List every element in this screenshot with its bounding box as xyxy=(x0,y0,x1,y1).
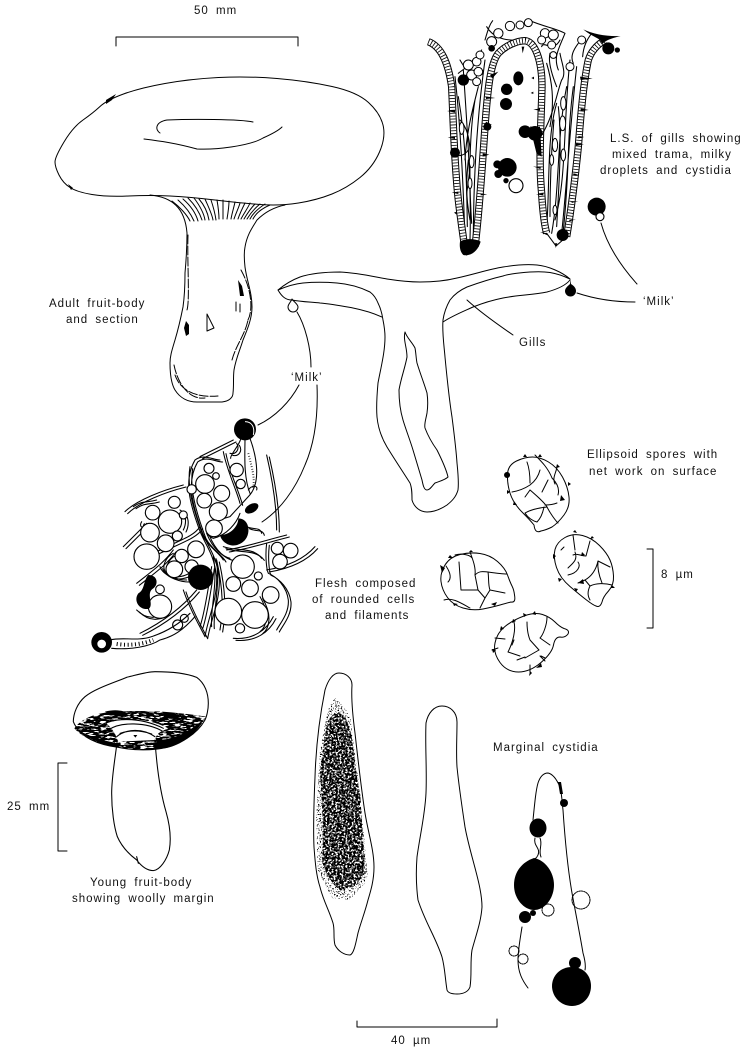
young stem xyxy=(112,740,170,871)
left gill edge xyxy=(278,290,382,317)
tail hypha with droplet xyxy=(91,613,195,653)
label: marginal cystidia: Marginal cystidia xyxy=(493,742,599,754)
cystidium plain xyxy=(416,706,482,994)
label: spores xyxy=(587,449,718,478)
label: young fruit-body: Young fruit-body xyxy=(90,877,192,889)
milk drops on section xyxy=(288,299,298,312)
pale zone around stem xyxy=(107,719,168,742)
woolly margin xyxy=(74,711,206,750)
labels: Milk and Gills xyxy=(291,296,675,384)
hyphal cells xyxy=(459,19,586,215)
label: L.S. of gills: mixed trama, milky xyxy=(612,149,732,161)
cystidium with granular contents xyxy=(314,673,374,955)
black milk droplets xyxy=(136,501,260,609)
adult fruit-body xyxy=(55,77,384,402)
labels: Milk and Gills: ‘Milk’ xyxy=(643,296,675,308)
scale bar: 8 micrometres: 8 µm xyxy=(661,569,694,581)
cap centre depression xyxy=(144,119,282,149)
milky droplets xyxy=(450,29,621,255)
filament doubling xyxy=(126,442,318,640)
stem marks xyxy=(184,280,244,336)
labels: Milk and Gills: Gills xyxy=(519,337,546,349)
label: flesh: Flesh composed xyxy=(315,578,416,590)
scale bar: 50 mm: 50 mm xyxy=(194,5,237,17)
spore bottom xyxy=(492,611,568,676)
spore left xyxy=(440,550,515,610)
label: L.S. of gills: droplets and cystidia xyxy=(600,165,732,177)
hypha rising to droplet xyxy=(207,438,257,538)
filaments xyxy=(123,440,315,638)
scale bar: 8 micrometres xyxy=(647,549,694,628)
L.S. of gills xyxy=(428,19,621,255)
label: adult fruit-body: and section xyxy=(66,314,139,326)
young fruit-body xyxy=(73,672,208,871)
wall A palisade xyxy=(428,42,465,250)
label: spores: net work on surface xyxy=(589,466,717,478)
label: flesh: of rounded cells xyxy=(312,594,415,606)
cap outline xyxy=(55,77,384,205)
stem xyxy=(150,195,285,402)
label: young fruit-body xyxy=(72,877,215,905)
central cavity xyxy=(399,332,448,490)
scale bar: 25 mm: 25 mm xyxy=(7,801,50,813)
gill tips xyxy=(465,233,567,255)
gills xyxy=(172,198,270,221)
trama strands xyxy=(455,21,592,243)
wall B palisade xyxy=(475,41,547,247)
labels: Milk and Gills: ‘Milk’ xyxy=(291,372,323,384)
label: L.S. of gills: L.S. of gills showing xyxy=(610,133,742,145)
wall C palisade xyxy=(567,40,605,237)
label: spores: Ellipsoid spores with xyxy=(587,449,718,461)
label: flesh xyxy=(312,578,416,622)
flesh cells and filaments xyxy=(91,418,318,653)
cystidia spines xyxy=(447,47,593,248)
white droplets xyxy=(509,179,523,193)
young cap xyxy=(73,672,208,750)
cystidium with milk droplets xyxy=(509,773,591,1006)
rounded cells xyxy=(134,463,298,633)
spore top xyxy=(504,454,571,532)
dark trama line xyxy=(542,53,564,135)
droplet at top xyxy=(234,418,256,440)
label: young fruit-body: showing woolly margin xyxy=(72,893,215,905)
right gill edge xyxy=(443,280,570,322)
scale bar: 40 micrometres: 40 µm xyxy=(391,1035,431,1047)
spores xyxy=(440,454,615,676)
scale bar: 25 mm xyxy=(7,763,67,851)
scale bar: 50 mm xyxy=(116,5,298,46)
label: adult fruit-body xyxy=(49,298,145,326)
section of fruit-body xyxy=(278,265,576,512)
label: flesh: and filaments xyxy=(325,610,409,622)
section outer outline xyxy=(278,265,570,512)
label: L.S. of gills xyxy=(600,133,742,177)
stem inner rim strokes xyxy=(174,235,251,398)
scale bar: 40 micrometres xyxy=(357,1019,497,1047)
spore right xyxy=(553,530,615,606)
label: adult fruit-body: Adult fruit-body xyxy=(49,298,145,310)
leader lines xyxy=(258,223,637,522)
